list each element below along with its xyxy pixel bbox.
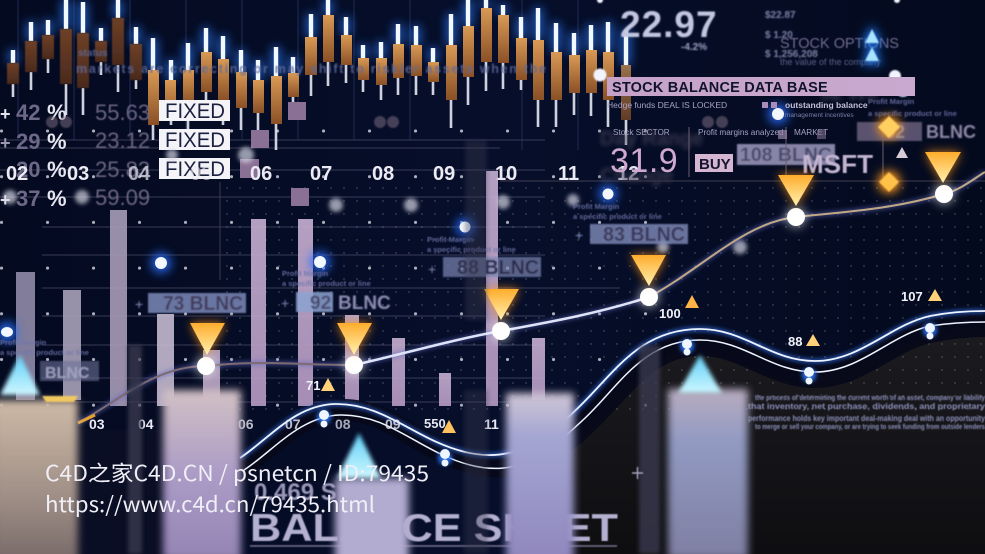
- tag: 82 BLNC: 82: [885, 122, 905, 142]
- sub captions: Profit margins analyzed: [698, 128, 784, 137]
- values: [95, 100, 150, 210]
- percentage rows: 37: [16, 186, 40, 211]
- watermark: [45, 457, 429, 519]
- lower axis labels: 04: [138, 416, 154, 432]
- lower axis labels: 07: [285, 416, 301, 432]
- small plus mark: [632, 467, 643, 479]
- x axis month labels: 05: [190, 163, 212, 185]
- blurred foreground pillars: [0, 355, 748, 554]
- stock options panel: the value of the company: [780, 57, 881, 67]
- fixed tags: [159, 100, 230, 181]
- lower axis labels: 11: [484, 416, 499, 432]
- tag: 92 BLNC: +: [281, 295, 289, 311]
- candle wicks: [13, 59, 626, 150]
- stock options panel: $ 1,256,208: [765, 49, 818, 60]
- value labels with triangles: 71: [306, 378, 320, 393]
- small blurred captions: Profit Margin: [427, 235, 474, 244]
- x axis month labels: [6, 163, 639, 185]
- stock options panel: STOCK OPTIONS: [780, 36, 899, 52]
- value labels with triangles: 550: [424, 416, 446, 431]
- sub captions: Stock SECTOR: [613, 128, 670, 137]
- fixed tags: FIXED: [165, 158, 225, 181]
- x axis month labels: 09: [433, 163, 455, 185]
- value labels with triangles: [306, 289, 942, 433]
- watermark: C4D之家C4D.CN / psnetcn / ID:79435: [45, 457, 429, 488]
- orange candle bodies: [148, 8, 631, 125]
- small blurred captions: Profit Margin: [0, 338, 47, 347]
- small blurred captions: [0, 97, 957, 357]
- 22.97 headline: -4.2%: [681, 42, 707, 53]
- faint background dots: [46, 116, 728, 128]
- 22.97 headline: 22.97: [620, 4, 718, 45]
- small blurred captions: a specific product or line: [282, 279, 371, 288]
- value labels with triangles: 88: [788, 334, 802, 349]
- lower axis labels: 03: [89, 416, 105, 432]
- lower axis labels: [89, 416, 499, 432]
- percentage rows: +: [0, 104, 11, 124]
- tag: 73 BLNC: +: [135, 296, 143, 312]
- pillar 3: [335, 478, 409, 554]
- values: 23.12: [95, 128, 150, 153]
- lower axis labels: 08: [335, 416, 351, 432]
- small blurred captions: a specific product or line: [0, 348, 89, 357]
- sub captions: [607, 100, 868, 137]
- values: 55.63: [95, 100, 150, 125]
- square markers: [240, 102, 309, 206]
- sub captions: outstanding balance: [785, 100, 868, 110]
- blurred overlay caption on candles: [76, 48, 546, 76]
- cyan pyramids: [0, 355, 722, 478]
- left stats table: [0, 100, 309, 211]
- fixed tags: FIXED: [165, 100, 225, 123]
- white trend line: [78, 152, 985, 423]
- percentage rows: %: [47, 186, 67, 211]
- values: 59.09: [95, 185, 150, 210]
- sub captions: MARKET: [794, 128, 828, 137]
- percentage rows: %: [47, 157, 67, 182]
- percentage rows: 29: [16, 129, 40, 154]
- x axis month labels: 04: [128, 163, 151, 185]
- tag: 92 BLNC: BLNC: [338, 293, 391, 314]
- x axis month labels: 03: [67, 163, 89, 185]
- tag: 92 BLNC: 92: [310, 293, 331, 314]
- balance sheet heading: 0.469 S: [254, 479, 337, 506]
- percentage rows: 20: [16, 157, 40, 182]
- dark candle bodies: [7, 18, 142, 88]
- x axis month labels: 02: [6, 163, 28, 185]
- dim background labels: [600, 83, 879, 187]
- trend nodes: [196, 184, 954, 376]
- sub captions: management incentives: [785, 112, 854, 119]
- small blurred captions: Profit Margin: [868, 97, 915, 106]
- sub captions: Hedge funds DEAL IS LOCKED: [607, 100, 727, 110]
- value labels with triangles: 100: [659, 306, 681, 321]
- percentage rows: %: [47, 129, 67, 154]
- stock options panel: [765, 10, 899, 67]
- x axis month labels: 06: [250, 163, 272, 185]
- bar chart: [16, 171, 545, 410]
- tag: 88 BLNC: +: [428, 261, 436, 277]
- tag: left BLNC: [40, 361, 99, 382]
- icon: cyan triangles: [862, 25, 882, 64]
- x axis month labels: 11: [558, 163, 579, 185]
- curve nodes: [317, 323, 937, 465]
- blurred data points: [3, 147, 747, 254]
- small blurred captions: Profit Margin: [282, 269, 329, 278]
- description paragraph: [748, 393, 985, 431]
- dot grid: [0, 0, 985, 412]
- small blurred captions: a specific product or line: [573, 212, 662, 221]
- dim background labels: 52 Wk: [820, 83, 879, 105]
- percentage rows: [0, 100, 67, 211]
- tag: 88 BLNC: 88 BLNC: [457, 257, 539, 279]
- blue nodes: [0, 104, 788, 342]
- gold diamonds: [878, 116, 900, 193]
- stock balance data base panel: [607, 77, 915, 180]
- tag: 92 BLNC: [281, 292, 391, 314]
- description paragraph: that inventory, net purchase, dividends, and proprietary: [748, 401, 985, 411]
- lower axis labels: 06: [238, 416, 254, 432]
- pillar 5: [668, 389, 748, 554]
- gold triangle markers: [190, 152, 961, 355]
- small blurred captions: Profit Margin: [573, 202, 620, 211]
- pillar 1: [0, 400, 78, 554]
- title bar: STOCK BALANCE DATA BASE: [612, 80, 828, 96]
- buy button: BUY: [699, 156, 731, 173]
- tag: 108 BLNC: 108 BLNC: [740, 145, 832, 166]
- candlestick chart: [7, 0, 631, 150]
- fixed tags: FIXED: [165, 129, 225, 152]
- tag: 82 BLNC: BLNC: [926, 122, 976, 142]
- dim background labels: Change: [600, 165, 673, 187]
- balance sheet heading: [250, 479, 618, 550]
- small blurred captions: a specific product or line: [868, 109, 957, 118]
- candle glow: [13, 0, 626, 80]
- stock options panel: $ 1.20: [765, 30, 793, 41]
- percentage rows: +: [0, 133, 11, 153]
- tag: 73 BLNC: 73 BLNC: [163, 293, 243, 315]
- watermark: https://www.c4d.cn/79435.html: [45, 488, 375, 519]
- title bar: [607, 77, 915, 96]
- small blurred captions: a specific product or line: [427, 245, 516, 254]
- tag: 83 BLNC: 83 BLNC: [603, 224, 685, 246]
- BLNC tags: [40, 122, 976, 382]
- pillar 2: [163, 390, 241, 554]
- x axis month labels: 07: [310, 163, 332, 185]
- blurred overlay caption on candles: status: [78, 48, 108, 59]
- x axis month labels: 08: [372, 163, 394, 185]
- blurred dark columns: [128, 140, 660, 554]
- percentage rows: %: [47, 100, 67, 125]
- tag: 83 BLNC: +: [575, 227, 583, 243]
- white blobs: [594, 0, 910, 97]
- lower axis labels: 09: [385, 416, 401, 432]
- x axis month labels: 12: [617, 163, 639, 185]
- balance sheet heading: BALANCE SHEET: [250, 507, 618, 550]
- candle highs: [13, 0, 626, 80]
- tag: left BLNC: BLNC: [45, 365, 90, 382]
- MSFT ticker: MSFT: [802, 149, 873, 179]
- pillar 4: [506, 393, 574, 554]
- percentage rows: +: [0, 190, 11, 210]
- x axis month labels: 10: [495, 163, 517, 185]
- percentage rows: 42: [16, 100, 40, 125]
- value labels with triangles: 107: [901, 289, 923, 304]
- amber pillar cap: [42, 396, 78, 402]
- value 31.9: 31.9: [610, 142, 678, 180]
- stock options panel: $22.87: [765, 10, 796, 21]
- dim background labels: Day Range: [600, 128, 703, 150]
- values: 25.83: [95, 157, 150, 182]
- blurred overlay caption on candles: markets are correcting or may shift to riskier assets when the: [76, 62, 546, 76]
- blue double curve: [240, 311, 985, 470]
- tag: 82 BLNC: [857, 122, 976, 142]
